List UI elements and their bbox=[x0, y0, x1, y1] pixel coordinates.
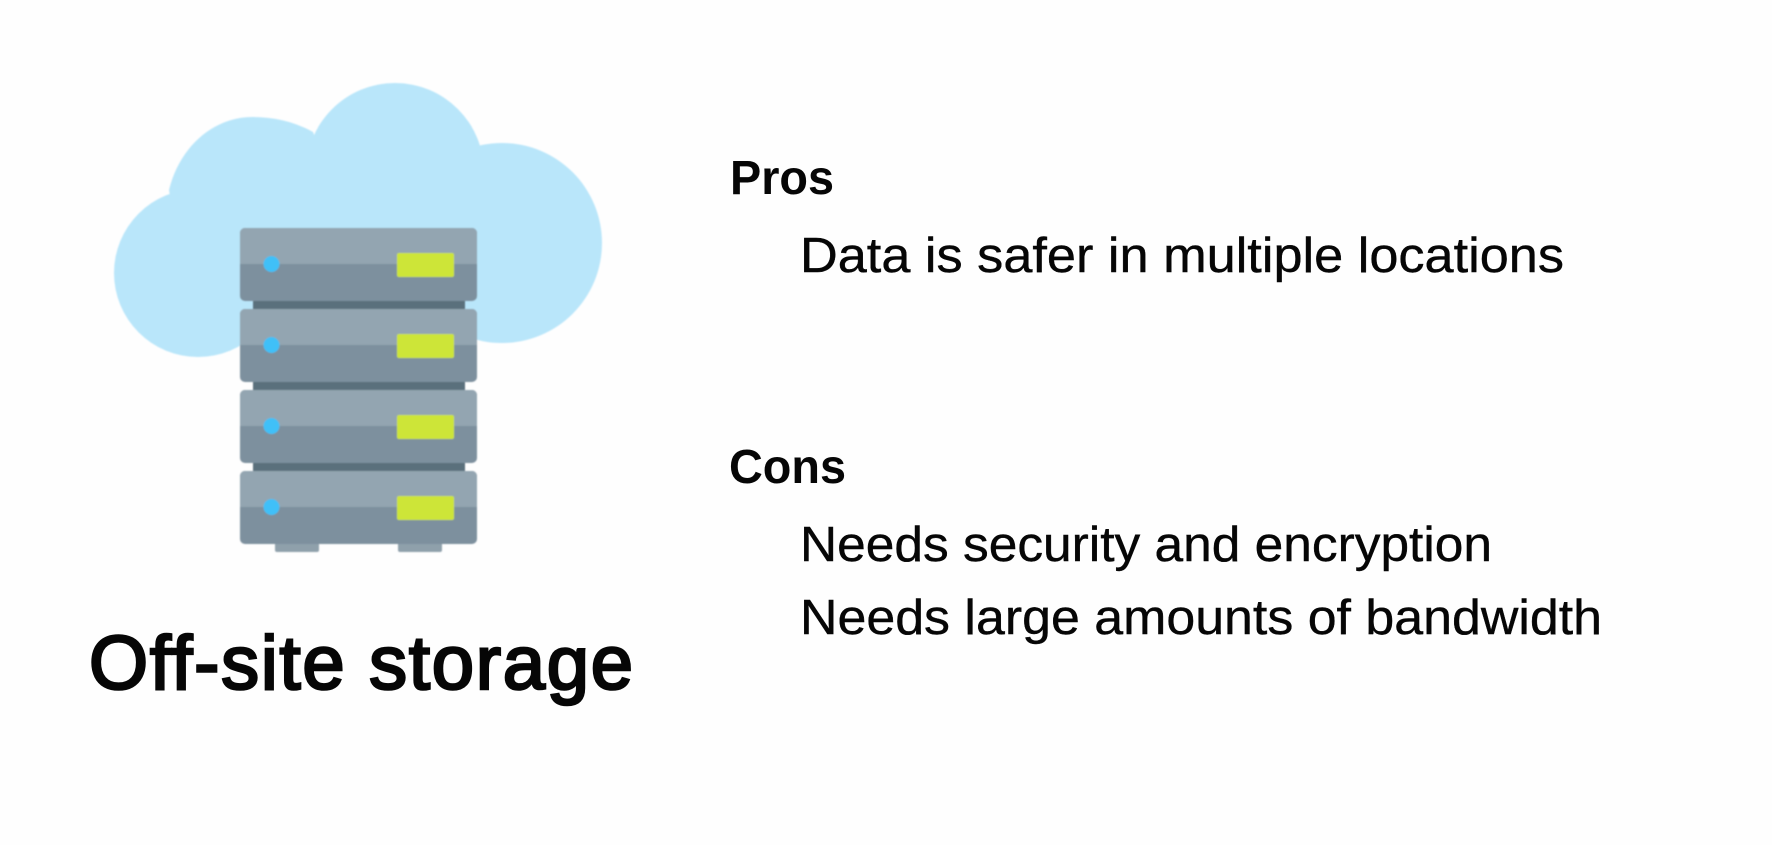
server unit 3 bbox=[240, 390, 477, 463]
server connectors bbox=[253, 298, 465, 473]
server feet bbox=[275, 540, 442, 552]
heading: cons: Cons bbox=[729, 441, 846, 494]
server unit 1 bbox=[240, 228, 477, 301]
text: pros item: Data is safer in multiple locations bbox=[800, 229, 1564, 283]
icon: server rack bbox=[240, 228, 477, 552]
heading: pros: Pros bbox=[730, 152, 834, 205]
server unit 4 bbox=[240, 471, 477, 544]
text: cons item 1: Needs security and encryption bbox=[800, 518, 1492, 572]
icon: cloud bbox=[114, 83, 602, 357]
server unit 2 bbox=[240, 309, 477, 382]
text: cons item 2: Needs large amounts of bandwidth bbox=[800, 591, 1602, 645]
title: Off-site storage bbox=[89, 621, 633, 706]
